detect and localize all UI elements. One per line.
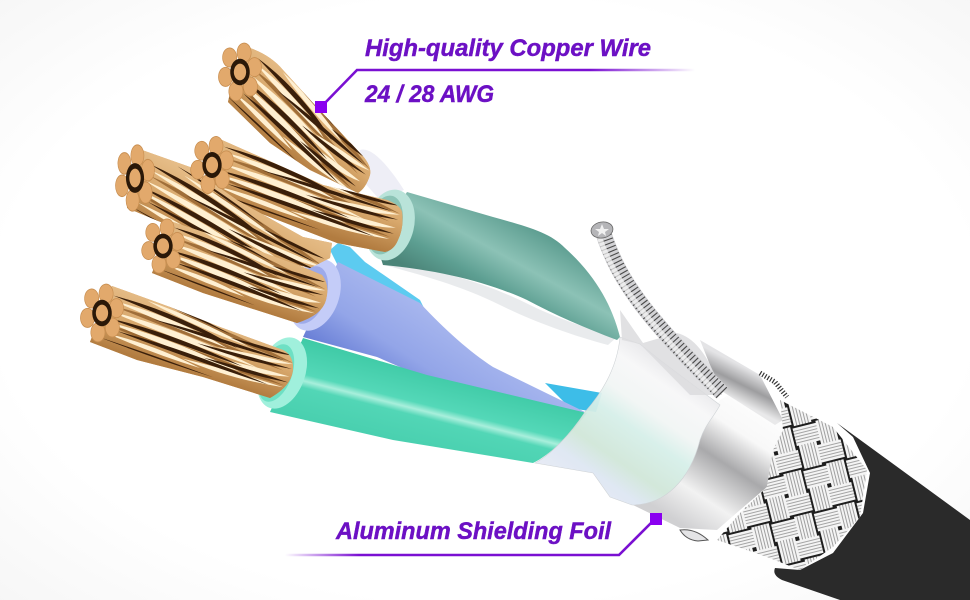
copper strand: left	[127, 150, 332, 268]
gauge text: 24 / 28 AWG	[364, 81, 494, 108]
foil flap behind drain wire	[620, 310, 722, 395]
copper strand: top	[228, 48, 370, 193]
dark green wire opening	[358, 184, 422, 266]
heading: Aluminum Shielding Foil	[335, 518, 612, 545]
blue wire opening	[280, 252, 350, 338]
transparent foil sleeve	[535, 337, 720, 505]
copper strand: bottom	[90, 286, 293, 398]
copper strand end faces	[77, 36, 265, 349]
white insulated wire	[360, 149, 625, 400]
heading: High-quality Copper Wire	[365, 35, 651, 62]
bright green insulated wire	[270, 338, 587, 463]
leader line	[285, 519, 655, 555]
braided metal shield	[717, 373, 867, 570]
copper strand: lower middle	[152, 222, 328, 323]
sky blue insulated wire	[330, 243, 602, 412]
leader line	[322, 70, 695, 106]
aluminum foil body	[633, 340, 783, 541]
callout: copper wire	[315, 35, 695, 113]
bright green wire opening	[248, 330, 316, 416]
callout: aluminum foil	[285, 513, 662, 555]
copper strand: second	[214, 140, 402, 252]
blue insulated wire	[303, 262, 585, 412]
marker	[650, 513, 662, 525]
dark green insulated wire	[375, 192, 620, 340]
marker	[315, 101, 327, 113]
black outer jacket	[774, 423, 970, 600]
silver drain wire	[590, 220, 722, 393]
